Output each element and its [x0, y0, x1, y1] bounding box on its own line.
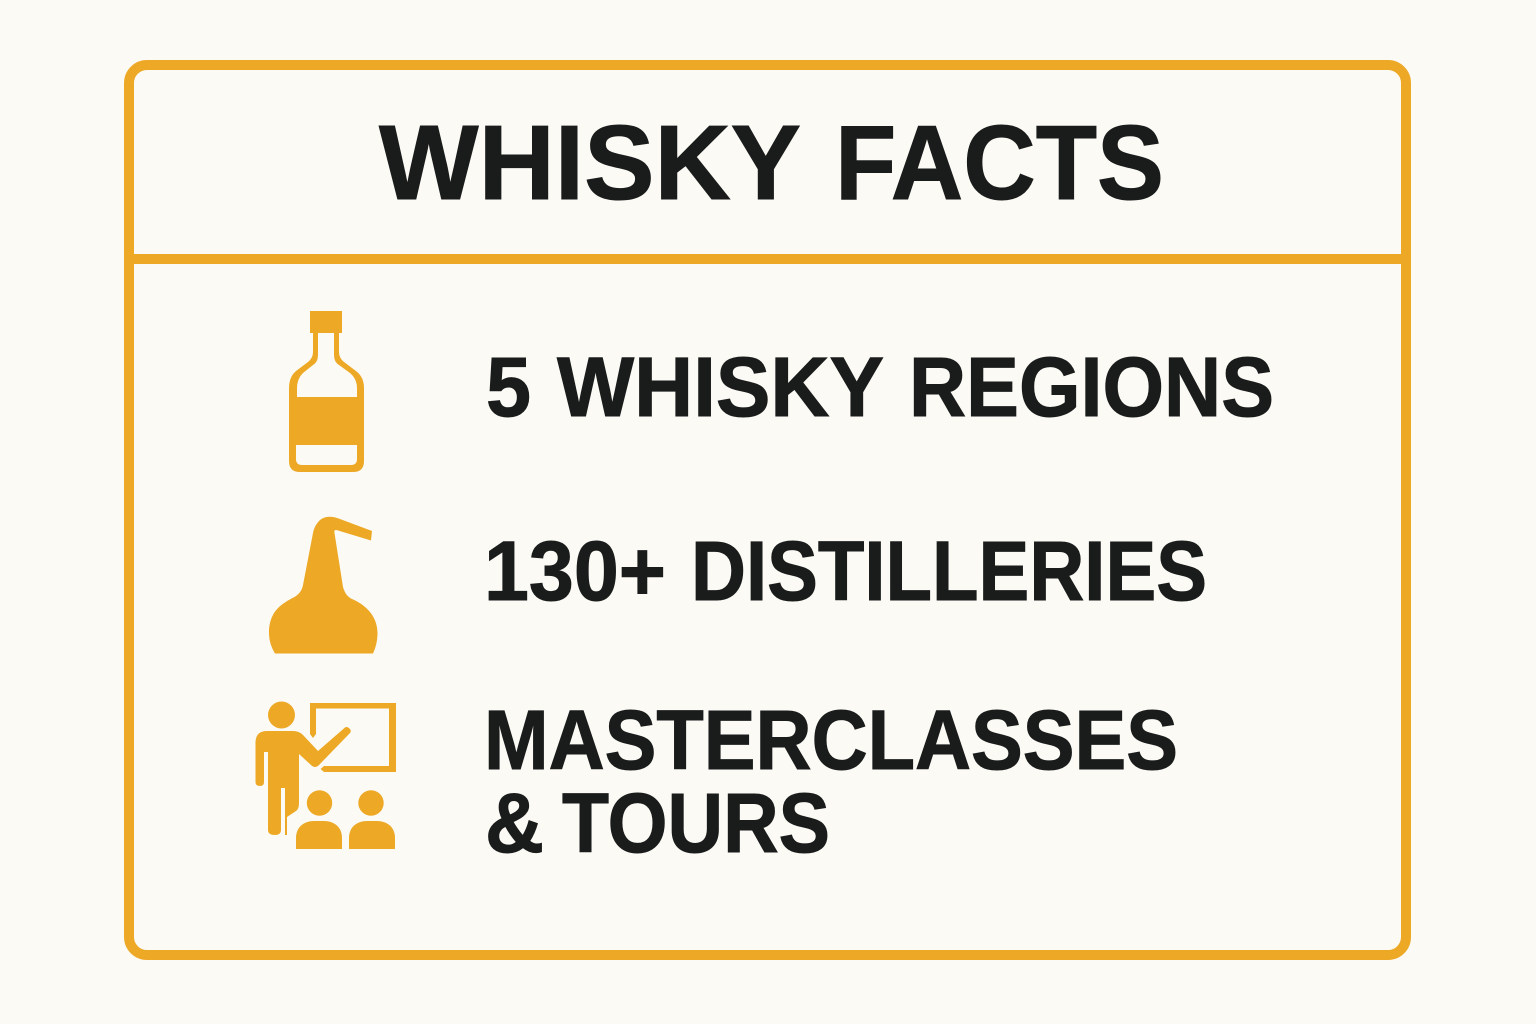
- fact text: masterclasses and tours: TOURS: [562, 776, 830, 870]
- fact text: 5 whisky regions: [486, 340, 1274, 434]
- teacher body and pointing arm: [256, 727, 351, 835]
- student two: [349, 790, 395, 849]
- fact text: 130+ distilleries: 130+: [484, 524, 666, 618]
- fact text: 130+ distilleries: [484, 524, 1207, 618]
- fact text: 5 whisky regions: WHISKY: [557, 340, 884, 434]
- title: [379, 104, 1164, 222]
- fact text: masterclasses and tours: MASTERCLASSES: [484, 693, 1178, 787]
- title: WHISKY: [379, 104, 801, 222]
- icon: whisky bottle: [289, 311, 364, 472]
- fact text: masterclasses and tours: &: [485, 776, 544, 870]
- fact text: 130+ distilleries: DISTILLERIES: [691, 524, 1207, 618]
- fact text: 5 whisky regions: REGIONS: [909, 340, 1274, 434]
- fact text: 5 whisky regions: 5: [486, 340, 531, 434]
- icon: copper pot still: [269, 517, 378, 654]
- title: FACTS: [835, 104, 1164, 222]
- panel: whisky facts card frame: [129, 65, 1406, 955]
- icon: masterclass teacher and students: [256, 702, 396, 849]
- student one: [296, 790, 342, 849]
- teacher head: [268, 702, 295, 728]
- presentation board: [310, 703, 396, 772]
- fact text: masterclasses and tours: [484, 693, 1178, 870]
